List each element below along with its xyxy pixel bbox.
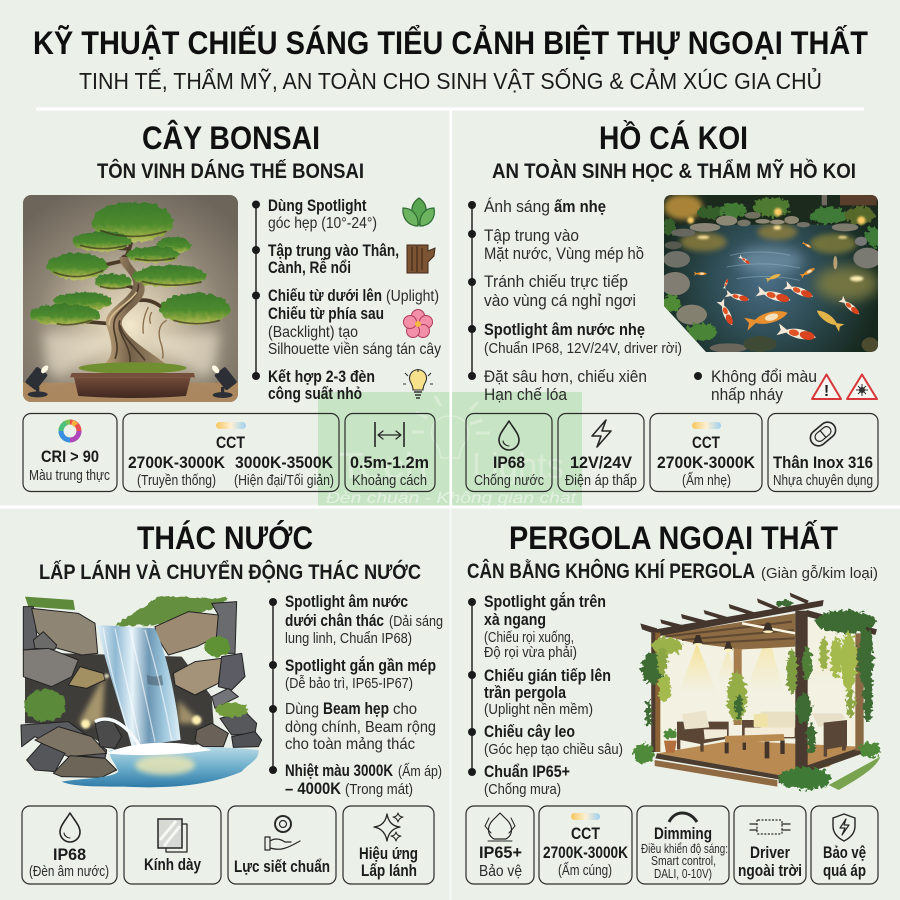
- spec card: sparkle effect: Hiệu ứng: [359, 845, 418, 863]
- deck: [657, 741, 859, 775]
- spec card: sparkle effect: Lấp lánh: [361, 862, 417, 880]
- rocks: [660, 212, 881, 353]
- watermark logo: Lights: [472, 445, 564, 486]
- heading: pergola: CÂN BẰNG KHÔNG KHÍ PERGOLA: [467, 559, 755, 583]
- bullet list: pergola: xà ngang: [484, 611, 546, 629]
- spec card: stainless body: [768, 414, 878, 492]
- spec card: CCT: CCT: [216, 434, 245, 452]
- spec card: CCT cosy: CCT: [571, 825, 600, 843]
- bullet list: waterfall: dưới chân thác: [285, 612, 384, 630]
- spec card: CRI: CRI > 90: [41, 448, 99, 466]
- bullet list: pergola: (Góc hẹp tạo chiều sâu): [484, 742, 623, 758]
- spec card: CRI: [23, 414, 117, 492]
- heading: waterfall: [39, 520, 421, 584]
- bullet list: waterfall: – 4000K: [285, 780, 341, 798]
- spec card: stainless body: Thân Inox 316: [773, 454, 873, 472]
- bullet list: bonsai: Chiếu từ phía sau: [268, 305, 384, 323]
- spec card: IP68 recessed: (Đèn âm nước): [29, 864, 109, 880]
- spot lamps: [25, 366, 237, 398]
- spec card: CCT warm: (Ấm nhẹ): [682, 472, 731, 489]
- furniture: [677, 722, 729, 752]
- posts: [651, 633, 660, 752]
- ceiling: [660, 613, 795, 649]
- bullet list: koi: Ánh sáng: [484, 197, 550, 216]
- branches: [85, 242, 162, 326]
- panel: koi pond: [466, 120, 882, 492]
- heading: pergola: (Giàn gỗ/kim loại): [761, 565, 878, 582]
- bullet list: koi: Hạn chế lóa: [484, 386, 568, 404]
- pot and moss: [79, 362, 187, 374]
- bullet list: waterfall: Beam hẹp: [323, 700, 389, 718]
- bullet list: pergola: [468, 592, 623, 798]
- corner post: [795, 611, 808, 768]
- spec card: IP68: Chống nước: [474, 473, 544, 489]
- spec card: voltage: [558, 414, 644, 492]
- spec card: dimming: Smart control,: [651, 854, 716, 868]
- spec card: outdoor driver: [734, 806, 806, 884]
- foliage: [30, 202, 230, 325]
- bullet list: koi: Đặt sâu hơn, chiếu xiên: [484, 368, 647, 386]
- bullet list: waterfall: Spotlight gắn gần mép: [285, 656, 436, 675]
- spec card: voltage: 12V/24V: [570, 454, 632, 472]
- spec card: IP65: Bảo vệ: [479, 863, 522, 880]
- spec card: CCT: 3000K-3500K: [235, 454, 333, 472]
- lamps: [693, 635, 703, 644]
- bullet list: koi: (Chuẩn IP68, 12V/24V, driver rời): [484, 341, 682, 357]
- bullet list: bonsai: Tập trung vào Thân,: [268, 242, 399, 260]
- spec card: IP65: IP65+: [479, 844, 522, 862]
- bullet list: waterfall: (Dễ bảo trì, IP65-IP67): [285, 675, 413, 692]
- spec card: dimming: Dimming: [654, 825, 712, 843]
- bullet list: koi: Spotlight âm nước nhẹ: [484, 321, 645, 339]
- watermark logo: [318, 392, 582, 508]
- icon: leaves: [403, 198, 434, 226]
- bullet list: pergola: Chiếu gián tiếp lên: [484, 667, 611, 685]
- spec card: CCT: 2700K-3000K: [128, 454, 225, 472]
- spec card: torque: Lực siết chuẩn: [234, 858, 330, 876]
- panel: pergola: [466, 520, 880, 884]
- bullet list: waterfall: (Trong mát): [345, 782, 413, 798]
- main title: [33, 25, 868, 94]
- watermark logo: Tech: [338, 445, 428, 486]
- panel: waterfall: [21, 520, 443, 884]
- heading: bonsai: [97, 120, 364, 183]
- bullet list: bonsai: Kết hợp 2-3 đèn: [268, 368, 375, 386]
- heading: koi: AN TOÀN SINH HỌC & THẨM MỸ HỒ KOI: [492, 159, 856, 183]
- trunk: [102, 257, 167, 365]
- bullet: no colour change or flicker: [694, 368, 817, 404]
- bullet list: pergola: (Chống mưa): [484, 782, 561, 798]
- bullet list: waterfall: Spotlight âm nước: [285, 593, 408, 611]
- icon: warning triangles: !: [824, 383, 829, 400]
- bullet list: waterfall: cho: [393, 701, 417, 718]
- bullet list: bonsai: Silhouette viền sáng tán cây: [268, 341, 441, 358]
- spec card: CCT: (Hiện đại/Tối giản): [234, 473, 334, 489]
- spec card: CCT cosy: 2700K-3000K: [543, 844, 628, 862]
- panel: bonsai: [20, 120, 441, 492]
- spec card: CCT warm: 2700K-3000K: [657, 454, 755, 472]
- bullet list: koi: [468, 197, 682, 404]
- spec card: thick glass: [124, 806, 221, 884]
- watermark logo: Đèn chuẩn - Không gian chất: [326, 489, 577, 507]
- bullet list: waterfall: lung linh, Chuẩn IP68): [285, 631, 412, 647]
- bullet list: bonsai: Chiếu từ dưới lên: [268, 287, 382, 305]
- pond lights: [680, 233, 727, 251]
- spec card: CCT: (Truyền thống): [137, 473, 216, 489]
- spec card: surge protection: Bảo vệ: [823, 844, 866, 862]
- bullet list: koi: Mặt nước, Vùng mép hồ: [484, 245, 644, 263]
- spec card: CCT warm: CCT: [692, 434, 720, 452]
- spec card: stainless body: Nhựa chuyên dụng: [773, 473, 873, 489]
- bullet list: bonsai: (Uplight): [386, 288, 439, 305]
- bullet list: waterfall: (Ấm áp): [398, 763, 442, 780]
- spec card: thick glass: Kính dày: [144, 856, 202, 874]
- bullet list: koi: Tập trung vào: [484, 227, 579, 245]
- spec card: sparkle effect: [343, 806, 434, 884]
- bullet list: koi: ấm nhẹ: [554, 198, 606, 216]
- spec card: CCT: [123, 414, 339, 492]
- bullet list: bonsai: (Backlight) tạo: [268, 324, 358, 341]
- illustration: bonsai tree: [20, 192, 242, 406]
- spec card: CCT cosy: [539, 806, 632, 884]
- heading: koi: [492, 120, 856, 183]
- bullet list: pergola: (Chiếu rọi xuống,: [484, 630, 574, 646]
- spec card: dimming: Điều khiển độ sáng:: [641, 842, 728, 856]
- spec card: distance: 0.5m-1.2m: [350, 454, 429, 472]
- spec card: IP68: IP68: [493, 454, 525, 472]
- heading: pergola: PERGOLA NGOẠI THẤT: [509, 520, 838, 556]
- bullet list: waterfall: dòng chính, Beam rộng: [285, 719, 436, 736]
- bullet list: waterfall: Dùng: [285, 701, 319, 718]
- bullet list: waterfall: (Dải sáng: [389, 614, 443, 630]
- heading: bonsai: TÔN VINH DÁNG THẾ BONSAI: [97, 159, 364, 183]
- spec card: CRI: Màu trung thực: [29, 468, 110, 484]
- spec card: outdoor driver: Driver: [750, 844, 790, 862]
- illustration: koi pond: [660, 192, 882, 356]
- bullet: no colour change or flicker: nhấp nháy: [711, 386, 784, 404]
- bullet list: pergola: (Uplight nền mềm): [484, 702, 593, 718]
- icon: light bulb: [403, 369, 433, 398]
- icon: warning triangles: [812, 374, 877, 400]
- bullet list: bonsai: Dùng Spotlight: [268, 197, 367, 215]
- bullet list: bonsai: công suất nhỏ: [268, 385, 362, 403]
- bullet: no colour change or flicker: Không đổi màu: [711, 368, 817, 386]
- bullet list: pergola: Chuẩn IP65+: [484, 763, 570, 781]
- spec card: distance: [345, 414, 435, 492]
- icon: flower: [404, 310, 432, 338]
- koi fish: [716, 298, 733, 326]
- bullet list: koi: Tránh chiếu trực tiếp: [484, 273, 628, 291]
- spec card: IP68: [466, 414, 552, 492]
- bullet list: pergola: Spotlight gắn trên: [484, 592, 606, 611]
- spec card: dimming: [637, 806, 729, 884]
- spec card: dimming: DALI, 0-10V): [654, 867, 712, 881]
- spec card: CCT warm: [650, 414, 762, 492]
- heading: waterfall: THÁC NƯỚC: [137, 520, 313, 556]
- bullet list: waterfall: [269, 593, 443, 798]
- bullet list: waterfall: cho toàn mảng thác: [285, 736, 415, 753]
- spec card: voltage: Điện áp thấp: [565, 473, 637, 489]
- spec card: outdoor driver: ngoài trời: [738, 862, 802, 880]
- bullet list: pergola: trần pergola: [484, 684, 567, 702]
- heading: waterfall: LẤP LÁNH VÀ CHUYỂN ĐỘNG THÁC NƯỚC: [39, 560, 421, 584]
- spec card: distance: Khoảng cách: [352, 473, 427, 489]
- spec card: torque: [228, 806, 336, 884]
- bullet list: pergola: Chiếu cây leo: [484, 723, 575, 741]
- spec card: surge protection: quá áp: [823, 862, 866, 880]
- spec card: IP65: [466, 806, 534, 884]
- bullet list: waterfall: Nhiệt màu 3000K: [285, 762, 393, 780]
- vines and plants: [633, 600, 880, 790]
- main title: TINH TẾ, THẨM MỸ, AN TOÀN CHO SINH VẬT SỐNG & CẢM XÚC GIA CHỦ: [79, 66, 822, 94]
- bullet list: bonsai: góc hẹp (10°-24°): [268, 215, 377, 232]
- bullet list: bonsai: Cành, Rễ nổi: [268, 258, 351, 277]
- bullet list: koi: vào vùng cá nghỉ ngơi: [484, 292, 636, 310]
- heading: pergola: [467, 520, 878, 583]
- heading: bonsai: CÂY BONSAI: [142, 120, 320, 156]
- illustration: pergola: [633, 593, 880, 790]
- icon: wood trunk: [407, 245, 435, 273]
- spec card: CCT cosy: (Ấm cúng): [558, 862, 612, 879]
- heading: koi: HỒ CÁ KOI: [599, 120, 748, 156]
- bullet list: bonsai: [252, 197, 441, 403]
- spec card: IP68 recessed: [22, 806, 117, 884]
- illustration: waterfall: [21, 597, 262, 787]
- spec card: IP68 recessed: IP68: [53, 846, 86, 864]
- bullet list: pergola: Độ rọi vừa phải): [484, 645, 577, 661]
- spec card: surge protection: [811, 806, 878, 884]
